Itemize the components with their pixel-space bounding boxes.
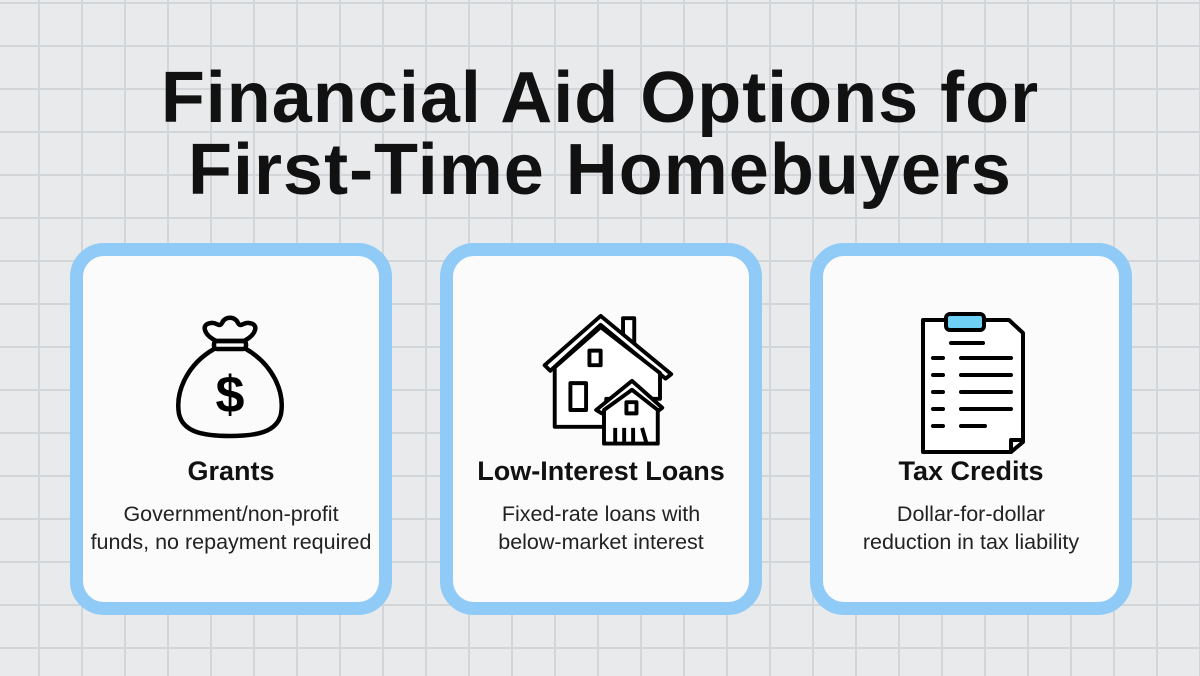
description: tax credits (863, 502, 1079, 554)
description: grants: Government/non-profit (123, 502, 339, 526)
heading: tax credits: Tax Credits (898, 456, 1044, 486)
heading: grants: Grants (187, 456, 275, 486)
heading: loans: Low-Interest Loans (477, 456, 725, 486)
panel: loans (440, 243, 762, 615)
title (161, 58, 1039, 210)
description: tax credits: reduction in tax liability (863, 530, 1079, 554)
title: First-Time Homebuyers (188, 130, 1012, 210)
icon: money bag: $ (216, 366, 245, 424)
description: grants (90, 502, 371, 554)
panel: grants (70, 243, 392, 615)
icon: document (921, 312, 1025, 454)
icon: houses (542, 314, 674, 446)
description: loans (498, 502, 704, 554)
title: Financial Aid Options for (161, 58, 1039, 138)
panel: tax credits (810, 243, 1132, 615)
description: loans: Fixed-rate loans with (502, 502, 700, 526)
description: loans: below-market interest (498, 530, 704, 554)
description: tax credits: Dollar-for-dollar (897, 502, 1045, 526)
description: grants: funds, no repayment required (91, 530, 371, 554)
icon: money bag (176, 316, 284, 438)
